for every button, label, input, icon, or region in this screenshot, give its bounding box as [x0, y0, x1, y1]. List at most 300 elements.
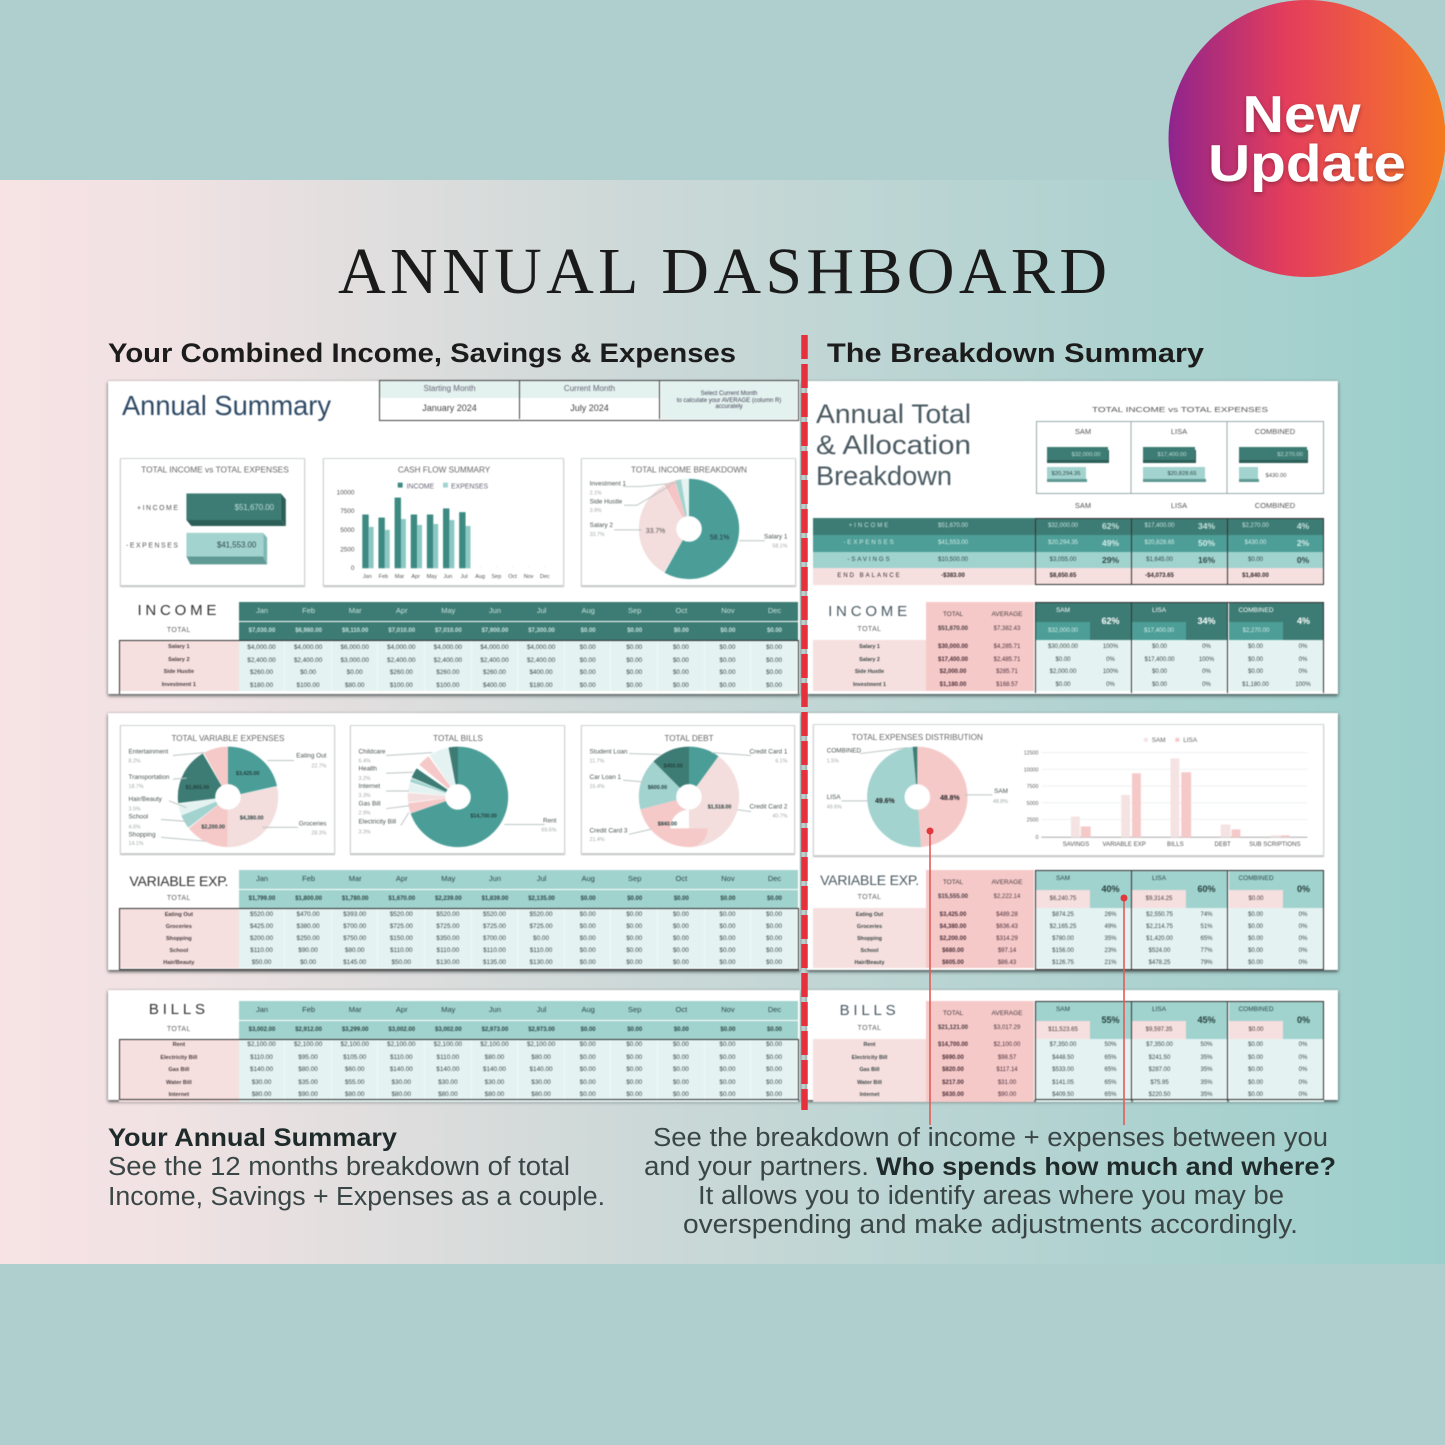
bills breakdown table: $0.00	[1248, 1042, 1263, 1048]
bills table: $30.00	[252, 1078, 271, 1086]
variable expenses table: $1,839.00	[482, 896, 508, 902]
income table: $2,400.00	[480, 657, 509, 664]
bar chart: cash flow summary: Sep	[491, 574, 501, 580]
variable expenses breakdown table: 79%	[1200, 960, 1212, 966]
pie chart: total bills: TOTAL BILLS	[433, 734, 483, 743]
variable expenses breakdown table: $2,222.14	[994, 894, 1020, 900]
income table: $0.00	[673, 657, 689, 664]
variable expenses table: $520.00	[436, 911, 459, 918]
income table: $4,000.00	[387, 644, 415, 651]
pie chart: total bills: Rent	[543, 817, 557, 824]
bills breakdown table: $217.00	[942, 1080, 964, 1086]
income table: $7,300.00	[528, 628, 555, 634]
variable expenses breakdown table: $156.00	[1052, 948, 1074, 954]
breakdown heading: & Allocation	[816, 430, 971, 460]
pie chart: total income breakdown: 3.9%	[590, 508, 602, 514]
pie chart: total bills	[350, 725, 565, 854]
chart: total expenses distribution: 2500	[1027, 818, 1039, 824]
pie chart: total variable expenses: Shopping	[129, 831, 156, 838]
income breakdown table: $285.71	[996, 669, 1018, 675]
income table: $0.00	[719, 657, 735, 664]
variable expenses breakdown table: $2,165.25	[1050, 924, 1076, 930]
dashed divider	[801, 335, 808, 1110]
pie chart: total bills: $14,700.00	[470, 814, 497, 820]
chart: total expenses distribution: SAM	[994, 788, 1008, 795]
summary table: $2,270.00	[1242, 523, 1269, 529]
variable expenses breakdown table: $0.00	[1248, 948, 1263, 954]
income breakdown table: 34%	[1197, 616, 1216, 626]
summary table: $41,553.00	[938, 540, 968, 546]
income table: $0.00	[626, 657, 642, 664]
income table: INCOME	[137, 602, 220, 619]
income table: $260.00	[483, 669, 506, 676]
bills table: $30.00	[531, 1078, 551, 1086]
bills breakdown table: 55%	[1101, 1015, 1120, 1025]
variable expenses table: $0.00	[766, 911, 782, 918]
variable expenses breakdown table: $15,555.00	[938, 894, 968, 900]
bills breakdown table: 50%	[1200, 1042, 1212, 1048]
variable expenses breakdown table: 23%	[1104, 948, 1116, 954]
bills breakdown table: $98.57	[998, 1054, 1016, 1060]
pie chart: total debt: 40.7%	[772, 814, 788, 820]
bills table: $0.00	[766, 1054, 782, 1060]
variable expenses table: $0.00	[673, 923, 689, 930]
income breakdown table: 0%	[1299, 657, 1307, 663]
text: breakdown explanation: It allows you to identify areas where you may be	[698, 1182, 1284, 1210]
variable expenses table: Hair/Beauty	[163, 960, 194, 966]
chart: total expenses distribution: 48.8%	[993, 799, 1008, 805]
income breakdown table: $4,285.71	[994, 644, 1020, 650]
variable expenses breakdown table: $314.29	[996, 936, 1018, 942]
pie chart: total variable expenses: 4.6%	[129, 824, 141, 830]
mini chart: income vs expenses by partner: $430.00	[1266, 473, 1286, 479]
income breakdown table: LISA	[1152, 607, 1166, 614]
income table: $0.00	[673, 669, 689, 676]
income table: May	[441, 606, 455, 615]
bills table: Electricity Bill	[160, 1054, 197, 1060]
bills breakdown table: $0.00	[1248, 1027, 1264, 1033]
variable expenses table: $0.00	[580, 959, 596, 966]
variable expenses table: $0.00	[766, 935, 782, 942]
income breakdown table: Salary 2	[859, 657, 880, 663]
bills table: May	[441, 1005, 455, 1014]
variable expenses breakdown table: $0.00	[1248, 960, 1263, 966]
income breakdown table: 0%	[1202, 682, 1211, 688]
pie chart: total debt: 16.4%	[590, 784, 605, 790]
variable expenses breakdown table: Hair/Beauty	[855, 960, 884, 966]
bills table: Mar	[349, 1005, 362, 1014]
summary table: 2%	[1297, 538, 1309, 548]
badge: new update	[1168, 0, 1445, 277]
bills table: BILLS	[149, 1001, 209, 1018]
income breakdown table: $1,180.00	[940, 682, 966, 688]
bills breakdown table: 35%	[1200, 1080, 1212, 1086]
income table: $2,400.00	[294, 657, 322, 664]
pie chart: total bills: 3.3%	[359, 829, 371, 835]
variable expenses table: $50.00	[252, 959, 271, 966]
variable expenses breakdown table: School	[860, 948, 878, 954]
bills breakdown table: 0%	[1299, 1054, 1307, 1060]
income table: $400.00	[483, 682, 506, 689]
bills breakdown table: $31.00	[998, 1080, 1016, 1086]
pie chart: total debt: Student Loan	[590, 749, 628, 756]
summary table: 16%	[1198, 554, 1215, 564]
variable expenses breakdown table: $4,380.00	[940, 924, 966, 930]
variable expenses table: $470.00	[297, 911, 320, 918]
bills table: $0.00	[673, 1041, 689, 1048]
income table: $4,000.00	[527, 644, 555, 651]
bills table: $95.00	[298, 1054, 318, 1060]
income breakdown table: $0.00	[1152, 644, 1167, 650]
chart: total expenses distribution: 49.6%	[875, 798, 895, 805]
bills table: $140.00	[250, 1066, 273, 1073]
bills breakdown table: Gas Bill	[859, 1067, 880, 1073]
variable expenses breakdown table: 60%	[1197, 884, 1216, 894]
bills breakdown table: 35%	[1200, 1092, 1212, 1098]
variable expenses table: Eating Out	[165, 912, 193, 918]
variable expenses table: $0.00	[719, 923, 735, 930]
income table: $0.00	[627, 628, 642, 634]
variable expenses breakdown table: 77%	[1200, 948, 1212, 954]
income table: $2,400.00	[387, 657, 415, 664]
income table: $0.00	[580, 669, 596, 676]
bills breakdown table: BILLS	[840, 1002, 899, 1019]
summary table: $1,645.00	[1146, 556, 1173, 562]
variable expenses table: Aug	[581, 874, 595, 883]
income table: Apr	[396, 606, 408, 615]
pie chart: total bills: 69.6%	[541, 827, 557, 833]
month selector: accurately	[715, 404, 743, 410]
bills table: $0.00	[766, 1078, 782, 1086]
bills table: Jun	[489, 1005, 501, 1014]
bills breakdown table: $0.00	[1248, 1067, 1263, 1073]
income table: $0.00	[766, 644, 782, 651]
bills breakdown table: $2,100.00	[994, 1042, 1020, 1048]
variable expenses table: Dec	[768, 874, 781, 883]
bills breakdown table: $141.05	[1052, 1080, 1074, 1086]
income breakdown table: $2,485.71	[994, 657, 1020, 663]
variable expenses breakdown table: 51%	[1200, 924, 1212, 930]
bills breakdown table: 50%	[1104, 1042, 1116, 1048]
bills table: Internet	[169, 1092, 189, 1098]
variable expenses table: Shopping	[166, 936, 192, 942]
bills breakdown table: $14,700.00	[938, 1042, 968, 1048]
variable expenses table: $80.00	[345, 947, 364, 954]
income breakdown table: 62%	[1101, 616, 1120, 626]
bills table: $2,100.00	[527, 1041, 555, 1048]
variable expenses table: Sep	[628, 874, 641, 883]
bills table: $0.00	[626, 1078, 642, 1086]
bills table: $105.00	[343, 1054, 366, 1060]
summary table: $20,828.65	[1144, 540, 1175, 546]
month selector: Select Current Month	[701, 391, 757, 397]
pie chart: total variable expenses: $1,865.00	[186, 785, 209, 791]
bills table: $0.00	[766, 1091, 782, 1098]
pie chart: total variable expenses: $3,425.00	[236, 771, 260, 777]
bills table: $3,002.00	[249, 1027, 275, 1033]
bills breakdown table: 65%	[1104, 1067, 1116, 1073]
month selector: Starting Month	[423, 384, 476, 393]
bills table: $2,973.00	[482, 1027, 508, 1033]
bills table: $0.00	[673, 1054, 689, 1060]
income breakdown table: $2,000.00	[940, 669, 966, 675]
income table: $0.00	[626, 669, 642, 676]
bills breakdown table: $7,350.00	[1146, 1042, 1173, 1048]
variable expenses table: $520.00	[390, 911, 413, 918]
income table: $180.00	[529, 682, 553, 689]
income breakdown table: $2,270.00	[1243, 628, 1269, 634]
pie chart: total variable expenses: Eating Out	[296, 753, 327, 760]
bills breakdown table: $11,523.65	[1048, 1027, 1078, 1033]
variable expenses table: $520.00	[483, 911, 506, 918]
variable expenses breakdown table: VARIABLE EXP.	[820, 872, 919, 888]
bills breakdown table: 0%	[1299, 1042, 1307, 1048]
summary table: -$4,073.65	[1145, 573, 1174, 579]
bar chart: cash flow summary: 5000	[340, 527, 355, 534]
chart: total expenses distribution: 5000	[1027, 801, 1039, 807]
bills table: Oct	[675, 1005, 687, 1014]
bar chart: cash flow summary: 2500	[340, 547, 355, 554]
income breakdown table: 100%	[1295, 682, 1311, 688]
bills breakdown table: 0%	[1299, 1067, 1307, 1073]
chart: total income vs total expenses: +INCOME	[137, 505, 180, 512]
mini chart: income vs expenses by partner: $20,294.35	[1051, 471, 1081, 477]
income table: $2,400.00	[527, 657, 555, 664]
bills breakdown table: Electricity Bill	[852, 1054, 887, 1060]
income table: $7,010.00	[388, 628, 415, 634]
partner headings: LISA	[1171, 501, 1187, 510]
pie chart: total variable expenses: Transportation	[129, 774, 170, 781]
income breakdown table: 100%	[1103, 669, 1118, 675]
bills breakdown table: $448.50	[1052, 1054, 1074, 1060]
variable expenses table: $725.00	[483, 923, 506, 930]
pie chart: total income breakdown: Side Hustle	[590, 498, 623, 505]
pie chart: total variable expenses: Entertainment	[129, 749, 168, 756]
bar chart: cash flow summary	[323, 458, 564, 586]
variable expenses breakdown table: $478.25	[1149, 960, 1170, 966]
variable expenses breakdown table: COMBINED	[1238, 875, 1274, 882]
bills table: Aug	[581, 1005, 595, 1014]
bills table: $0.00	[580, 1078, 596, 1086]
variable expenses breakdown table: 26%	[1104, 912, 1116, 918]
summary table: $10,500.00	[938, 556, 968, 562]
variable expenses table: $0.00	[581, 896, 596, 902]
variable expenses table: $700.00	[343, 923, 366, 930]
summary table: END BALANCE	[837, 573, 902, 579]
variable expenses table	[118, 870, 800, 971]
income table: $260.00	[250, 669, 273, 676]
variable expenses breakdown table: $780.00	[1052, 936, 1074, 942]
chart: total expenses distribution: SAM	[1152, 737, 1166, 744]
variable expenses table: $0.00	[300, 959, 316, 966]
panel: annual summary	[108, 381, 800, 694]
variable expenses table: School	[170, 948, 188, 954]
pie chart: total debt: TOTAL DEBT	[664, 734, 714, 743]
mini chart: income vs expenses by partner: LISA	[1171, 427, 1187, 436]
income breakdown table: 100%	[1199, 657, 1214, 663]
annual summary heading: Annual Summary	[122, 390, 331, 421]
bills breakdown table: 35%	[1200, 1054, 1212, 1060]
income table: $0.00	[580, 644, 596, 651]
income breakdown table: Side Hustle	[855, 669, 884, 675]
bills breakdown table	[812, 1000, 1325, 1103]
variable expenses table: $110.00	[530, 947, 552, 954]
summary table: -SAVINGS	[847, 556, 892, 562]
bills table: Jul	[537, 1005, 546, 1014]
pie chart: total variable expenses: 14.1%	[129, 841, 144, 847]
income table: $7,030.00	[249, 628, 275, 634]
income table: $0.00	[674, 628, 689, 634]
bills breakdown table: TOTAL	[858, 1025, 881, 1032]
pie chart: total variable expenses: $4,380.00	[240, 816, 263, 822]
variable expenses breakdown table	[812, 869, 1325, 971]
income breakdown table: $0.00	[1248, 644, 1263, 650]
summary table: 34%	[1198, 521, 1215, 531]
text: breakdown explanation: and your partners.	[644, 1153, 869, 1181]
income table: Salary 1	[168, 644, 190, 650]
variable expenses table: Apr	[396, 874, 408, 883]
variable expenses table: $110.00	[437, 947, 459, 954]
mini chart: income vs expenses by partner: TOTAL INCOME vs TOTAL EXPENSES	[1092, 405, 1268, 414]
pie chart: total income breakdown: 58.1%	[710, 535, 729, 542]
income table: Side Hustle	[164, 669, 194, 675]
variable expenses table: $1,799.00	[249, 896, 275, 902]
chart: total expenses distribution: 48.8%	[940, 795, 960, 802]
month selector	[379, 380, 799, 421]
variable expenses breakdown table: AVERAGE	[992, 879, 1022, 886]
bills table: $80.00	[485, 1054, 504, 1060]
bills breakdown table: $220.50	[1149, 1092, 1170, 1098]
mini chart: income vs expenses by partner: $20,828.65	[1167, 471, 1197, 477]
variable expenses table: $110.00	[390, 947, 413, 954]
bills table: $2,912.00	[295, 1027, 322, 1033]
bills table: $0.00	[626, 1054, 642, 1060]
pie chart: total debt: 21.4%	[590, 837, 605, 843]
text: breakdown explanation	[644, 1124, 1336, 1239]
bar chart: cash flow summary: Oct	[508, 574, 517, 580]
bills breakdown table: 65%	[1104, 1092, 1116, 1098]
month selector: January 2024	[422, 403, 477, 413]
bar chart: cash flow summary: 10000	[337, 489, 355, 496]
variable expenses table: $50.00	[391, 959, 411, 966]
pie chart: total debt: $600.00	[648, 785, 667, 791]
bills breakdown table: 0%	[1297, 1015, 1310, 1025]
bar chart: cash flow summary: 7500	[340, 508, 355, 515]
bills table: $0.00	[580, 1041, 596, 1048]
bar chart: cash flow summary: -	[512, 563, 514, 568]
bills table: $80.00	[531, 1091, 551, 1098]
summary table: 29%	[1102, 554, 1119, 564]
income table: $4,000.00	[247, 644, 276, 651]
bills table: $0.00	[766, 1066, 782, 1073]
income table: Oct	[675, 606, 687, 615]
variable expenses breakdown table: $0.00	[1248, 924, 1263, 930]
variable expenses table: $725.00	[529, 923, 553, 930]
bills breakdown table: $75.95	[1150, 1080, 1169, 1086]
pie chart: total variable expenses: School	[129, 814, 148, 821]
chart: total expenses distribution: 0	[1036, 835, 1039, 841]
pie chart: total income breakdown: 33.7%	[590, 532, 605, 538]
bills breakdown table: $7,350.00	[1050, 1042, 1076, 1048]
variable expenses breakdown table: $489.28	[996, 912, 1018, 918]
chart: total expenses distribution: SAVINGS	[1063, 841, 1089, 848]
month selector: to calculate your AVERAGE (column R)	[677, 398, 781, 404]
pie chart: total variable expenses: 3.5%	[129, 807, 141, 813]
income table: $0.00	[626, 682, 642, 689]
bills table: Gas Bill	[168, 1067, 189, 1073]
breakdown heading: Breakdown	[816, 461, 952, 491]
income table: Nov	[721, 606, 735, 615]
bills breakdown table: $630.00	[942, 1092, 964, 1098]
bar chart: cash flow summary: -	[544, 563, 546, 568]
pie chart: total income breakdown: Investment 1	[590, 481, 627, 488]
income table: $7,900.00	[482, 628, 508, 634]
chart: total expenses distribution: LISA	[1183, 737, 1198, 744]
bills table: $0.00	[673, 1078, 689, 1086]
summary table: $20,294.35	[1048, 540, 1078, 546]
bills breakdown table: $9,597.35	[1146, 1027, 1172, 1033]
variable expenses table: $110.00	[250, 947, 273, 954]
pie chart: total debt: 6.1%	[775, 758, 788, 764]
income table: Sep	[628, 606, 641, 615]
bills table: $30.00	[438, 1078, 458, 1086]
bills table: $0.00	[626, 1066, 642, 1073]
bills table: $80.00	[391, 1091, 411, 1098]
text: breakdown explanation: overspending and make adjustments accordingly.	[683, 1211, 1298, 1239]
variable expenses breakdown table: Shopping	[857, 936, 882, 942]
bills breakdown table: LISA	[1152, 1006, 1166, 1013]
income table: $0.00	[720, 628, 735, 634]
bills breakdown table: 0%	[1299, 1092, 1307, 1098]
variable expenses breakdown table: $2,200.00	[940, 936, 966, 942]
summary table: -$383.00	[941, 573, 965, 579]
bills breakdown table: 65%	[1104, 1080, 1116, 1086]
variable expenses table: $200.00	[250, 935, 273, 942]
variable expenses table: Oct	[675, 874, 687, 883]
pie chart: total variable expenses: 8.2%	[129, 758, 141, 764]
variable expenses table: $0.00	[766, 947, 782, 954]
chart: total income vs total expenses: $51,670.00	[235, 503, 275, 512]
income table: $4,000.00	[294, 644, 322, 651]
chart: total expenses distribution: 10000	[1024, 767, 1039, 773]
bills table: $0.00	[674, 1027, 689, 1033]
variable expenses table: $0.00	[719, 959, 735, 966]
pie chart: total variable expenses: 28.3%	[311, 830, 327, 836]
variable expenses table: Mar	[349, 874, 362, 883]
bills table: $90.00	[298, 1091, 318, 1098]
income breakdown table: 4%	[1297, 616, 1310, 626]
bills table: $0.00	[719, 1066, 735, 1073]
panel: variable expenses	[108, 713, 800, 970]
variable expenses table: $0.00	[626, 947, 642, 954]
variable expenses table: $2,239.00	[435, 896, 462, 902]
pie chart: total income breakdown: Salary 1	[764, 534, 788, 541]
variable expenses table: Groceries	[166, 924, 192, 930]
income table: $2,400.00	[247, 657, 276, 664]
bar chart: cash flow summary: Apr	[411, 574, 420, 580]
pie chart: total variable expenses: 18.7%	[129, 784, 144, 790]
income breakdown table: TOTAL	[858, 626, 881, 633]
income table: $0.00	[580, 657, 596, 664]
variable expenses table: $130.00	[436, 959, 459, 966]
variable expenses table: $1,780.00	[342, 896, 369, 902]
bills breakdown table: 65%	[1104, 1054, 1116, 1060]
mini chart: income vs expenses by partner: COMBINED	[1255, 427, 1296, 436]
income breakdown table: $17,400.00	[938, 657, 968, 663]
bills table: $0.00	[580, 1091, 596, 1098]
summary table: 4%	[1297, 521, 1309, 531]
bills breakdown table: $0.00	[1248, 1092, 1263, 1098]
